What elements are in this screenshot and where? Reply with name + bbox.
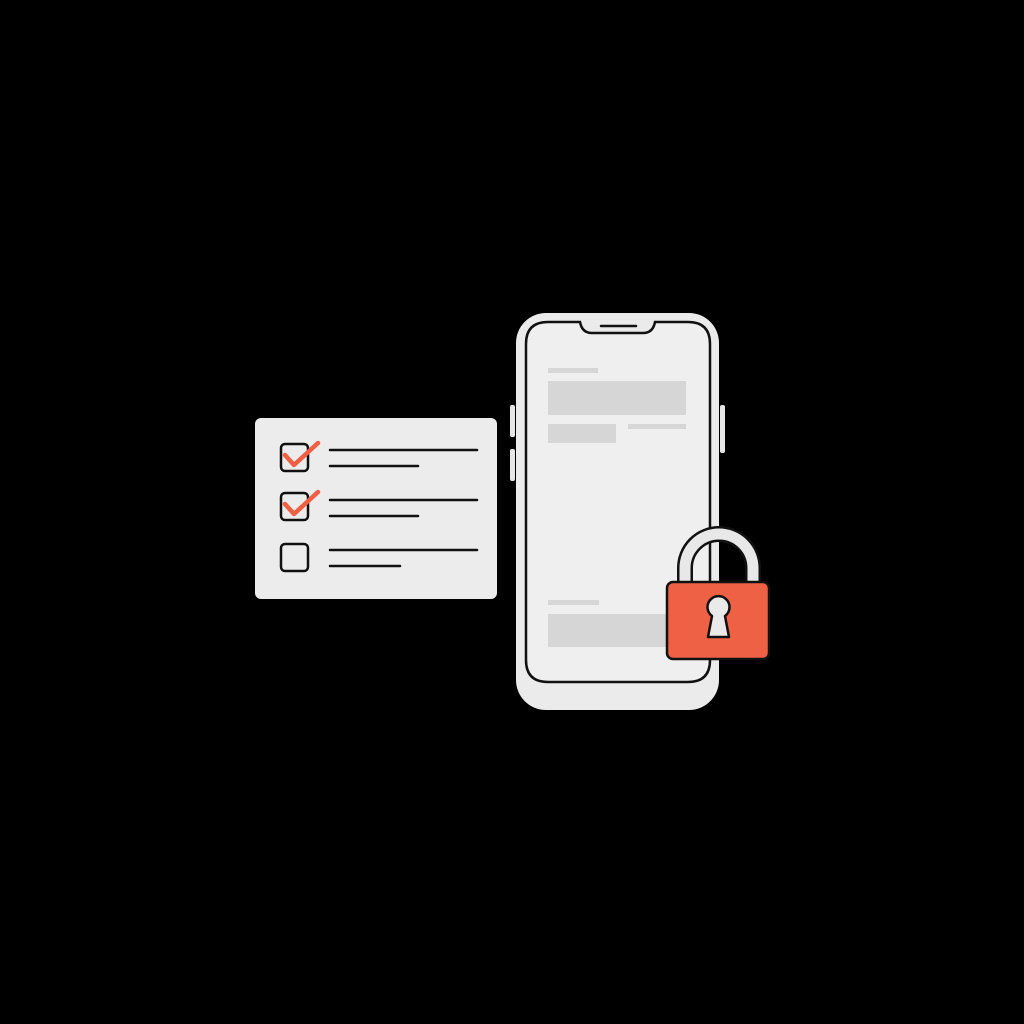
icon: padlock bbox=[667, 534, 769, 659]
checkbox 3 empty bbox=[281, 544, 308, 571]
checklist lines 1 bbox=[330, 450, 477, 466]
checkbox 2 checked bbox=[281, 492, 318, 520]
checklist lines 2 bbox=[330, 500, 477, 516]
checklist lines 3 bbox=[330, 550, 477, 566]
phone bbox=[510, 313, 725, 710]
panel: checklist card bbox=[255, 418, 497, 599]
screen placeholders bbox=[548, 368, 686, 647]
checkbox 1 checked bbox=[281, 443, 318, 471]
